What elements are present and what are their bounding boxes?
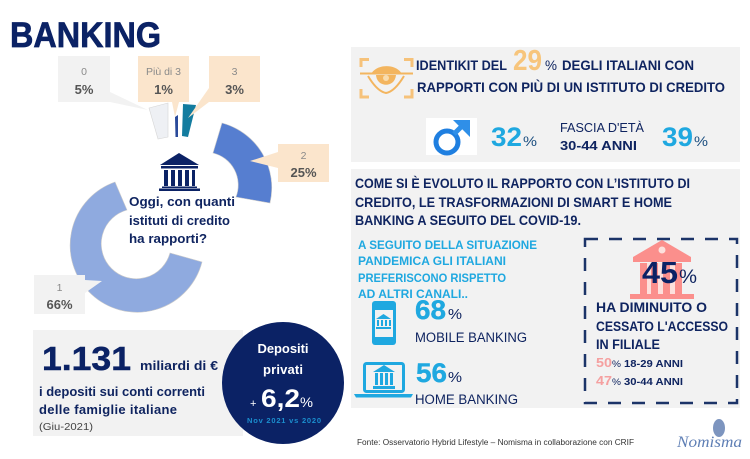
- intro text: PANDEMICA GLI ITALIANI: [358, 254, 506, 268]
- intro text: [358, 238, 537, 301]
- panel heading: BANKING A SEGUITO DEL COVID-19.: [355, 212, 581, 228]
- callout: 0: [58, 56, 148, 110]
- identikit heading: DEGLI ITALIANI CON: [562, 57, 694, 73]
- icon: pink bank: [630, 240, 694, 299]
- age breakdown 18-29: %: [612, 359, 621, 369]
- logo: Nomisma: Nomisma: [676, 434, 742, 451]
- panel heading: CREDITO, LE TRASFORMAZIONI DI SMART E HOME: [355, 194, 672, 210]
- panel: identikit: [351, 45, 740, 162]
- icon: phone with bank: [372, 301, 396, 345]
- callout: più di 3: 1%: [154, 82, 173, 97]
- age band label: FASCIA D'ETÀ: [560, 120, 645, 135]
- stat: age 39%: %: [694, 133, 708, 149]
- callout: 3: [188, 56, 260, 118]
- age band label: [560, 120, 645, 153]
- stat: mobile banking: [415, 295, 527, 345]
- age breakdown 30-44: [596, 373, 683, 388]
- callout description: HA DIMINUITO O: [596, 300, 707, 315]
- donut chart: number of banks: [70, 103, 272, 312]
- callout: 3: 3: [232, 66, 238, 78]
- callout: 3: 3%: [225, 82, 244, 97]
- stat: home banking: %: [448, 369, 462, 386]
- callout: 2: [250, 144, 329, 182]
- callout: 1: [34, 275, 102, 314]
- identikit heading: 29: [513, 45, 542, 77]
- deposits description: (Giu-2021): [39, 421, 93, 433]
- deposits amount: 1.131: [42, 340, 131, 377]
- badge: private deposits: Nov 2021 vs 2020: [247, 416, 321, 425]
- title: BANKING: [10, 16, 161, 55]
- logo: Nomisma: [676, 419, 742, 451]
- panel heading: [355, 175, 690, 228]
- callout description: CESSATO L'ACCESSO: [596, 319, 728, 334]
- icon: laptop with bank: [354, 364, 413, 398]
- callout description: IN FILIALE: [596, 337, 660, 352]
- segment: more than 3 institutes 1%: [175, 115, 178, 137]
- stat: age 39%: 39: [662, 122, 693, 152]
- identikit heading: RAPPORTI CON PIÙ DI UN ISTITUTO DI CREDITO: [417, 78, 725, 95]
- age band label: 30-44 ANNI: [560, 139, 637, 153]
- stat: home banking: HOME BANKING: [415, 392, 518, 407]
- segment: 3 institutes 3%: [182, 104, 196, 137]
- intro text: PREFERISCONO RISPETTO: [358, 271, 506, 285]
- stat: male 32%: [491, 122, 537, 152]
- age breakdown 18-29: 18-29 ANNI: [624, 359, 683, 370]
- badge: private deposits: %: [300, 394, 313, 410]
- deposits description: [39, 384, 205, 433]
- badge: private deposits: 6,2: [261, 385, 300, 413]
- callout: 0: 5%: [75, 82, 94, 97]
- stat: 45%: %: [679, 267, 697, 288]
- age breakdown 30-44: 47: [596, 373, 612, 388]
- stat: home banking: 56: [416, 358, 447, 388]
- badge: private deposits: Depositi: [258, 341, 308, 356]
- icon: male symbol: [426, 118, 477, 155]
- callout: 1: 1: [57, 282, 63, 294]
- identikit heading: [416, 45, 725, 95]
- question text: Oggi, con quanti: [129, 194, 235, 209]
- stat: mobile banking: 68: [415, 295, 446, 325]
- age breakdown 30-44: %: [612, 377, 621, 387]
- callout: 0: 0: [81, 66, 87, 78]
- panel: deposits: [33, 330, 243, 436]
- icon: eye scan: [360, 60, 413, 97]
- stat: mobile banking: %: [448, 306, 462, 323]
- badge: private deposits: [222, 322, 344, 444]
- callout: più di 3: Più di 3: [146, 66, 181, 78]
- deposits description: i depositi sui conti correnti: [39, 384, 205, 399]
- callout: più di 3: [138, 56, 189, 117]
- stat: male 32%: %: [523, 133, 537, 149]
- panel heading: COME SI È EVOLUTO IL RAPPORTO CON L’ISTITUTO DI: [355, 175, 690, 191]
- intro text: A SEGUITO DELLA SITUAZIONE: [358, 238, 537, 252]
- deposits description: delle famiglie italiane: [39, 402, 177, 417]
- callout: 2: 2: [301, 150, 307, 162]
- identikit heading: IDENTIKIT DEL: [416, 57, 507, 73]
- icon: bank: [159, 153, 200, 191]
- panel: covid evolution: [351, 169, 740, 408]
- segment: 2 institutes 25%: [213, 123, 272, 203]
- age breakdown 18-29: 50: [596, 355, 612, 370]
- source note: Fonte: Osservatorio Hybrid Lifestyle – Nomisma in collaborazione con CRIF: [357, 438, 634, 447]
- identikit heading: %: [545, 57, 557, 73]
- callout: 2: 25%: [290, 165, 317, 180]
- question text: [129, 194, 235, 246]
- dashed callout: branch access: [585, 239, 737, 403]
- question text: istituti di credito: [129, 213, 230, 228]
- stat: home banking: [415, 358, 518, 407]
- badge: private deposits: +: [250, 398, 256, 410]
- age breakdown 18-29: [596, 355, 683, 370]
- segment: 0 institutes 5%: [149, 103, 168, 139]
- deposits unit: miliardi di €: [140, 359, 218, 373]
- callout description: [596, 300, 728, 352]
- stat: mobile banking: MOBILE BANKING: [415, 330, 527, 345]
- age breakdown 30-44: 30-44 ANNI: [624, 377, 683, 388]
- question text: ha rapporti?: [129, 231, 207, 246]
- badge: private deposits: privati: [263, 362, 303, 377]
- stat: age 39%: [662, 122, 708, 152]
- intro text: AD ALTRI CANALI..: [358, 287, 468, 301]
- callout: 1: 66%: [46, 297, 73, 312]
- stat: 45%: 45: [642, 255, 678, 290]
- segment: 1 institute 66%: [70, 182, 202, 312]
- stat: male 32%: 32: [491, 122, 522, 152]
- stat: 45%: [642, 255, 697, 290]
